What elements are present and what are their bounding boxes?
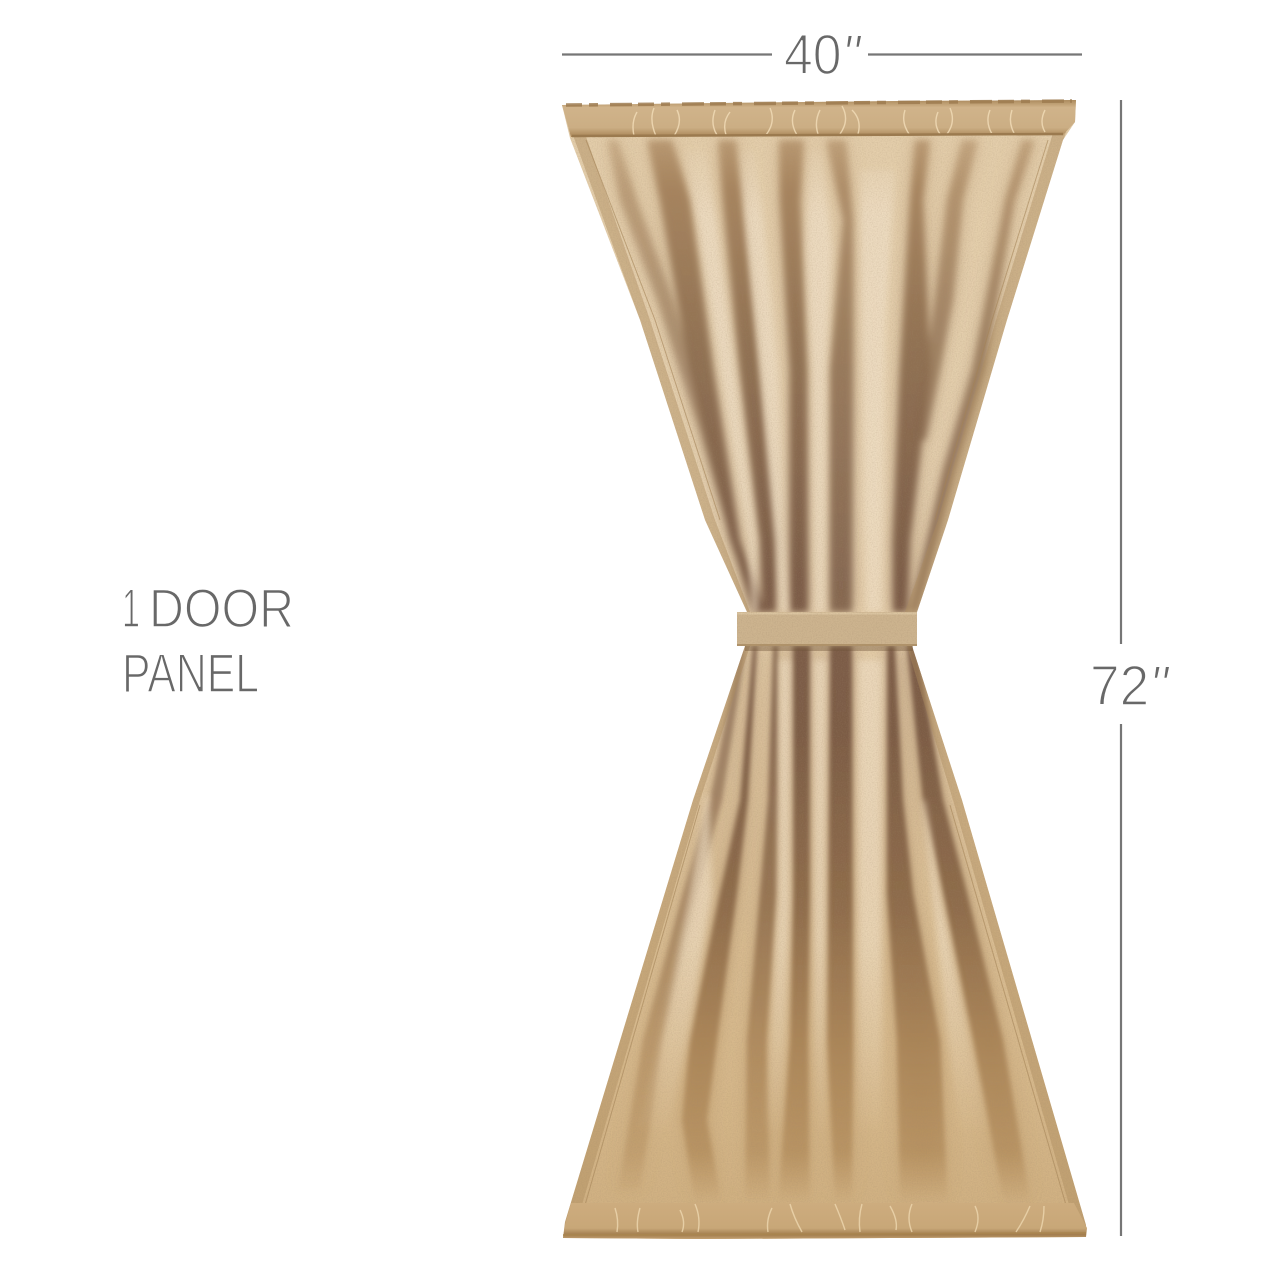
bottom rod pocket [563, 1203, 1087, 1239]
dimension: height 72 inches: 72" [1090, 654, 1171, 718]
label: 1 door panel: DOOR [149, 577, 294, 639]
lower folds [618, 646, 1032, 1210]
soft fold shadow underlay [614, 139, 1032, 1110]
upper folds [607, 140, 1035, 612]
fabric texture [566, 118, 1073, 1203]
tieback band [737, 612, 917, 651]
label: 1 door panel [122, 577, 294, 704]
side hems [562, 100, 1088, 1238]
curtain door panel [550, 95, 1100, 1245]
light ridges [640, 150, 990, 1130]
inner hem stitch lines [585, 140, 1066, 1205]
top rod pocket [562, 100, 1076, 137]
dimension: width 40 inches: 40" [784, 23, 863, 87]
label: 1 door panel: 1 [122, 577, 140, 639]
label: 1 door panel: PANEL [122, 642, 259, 704]
